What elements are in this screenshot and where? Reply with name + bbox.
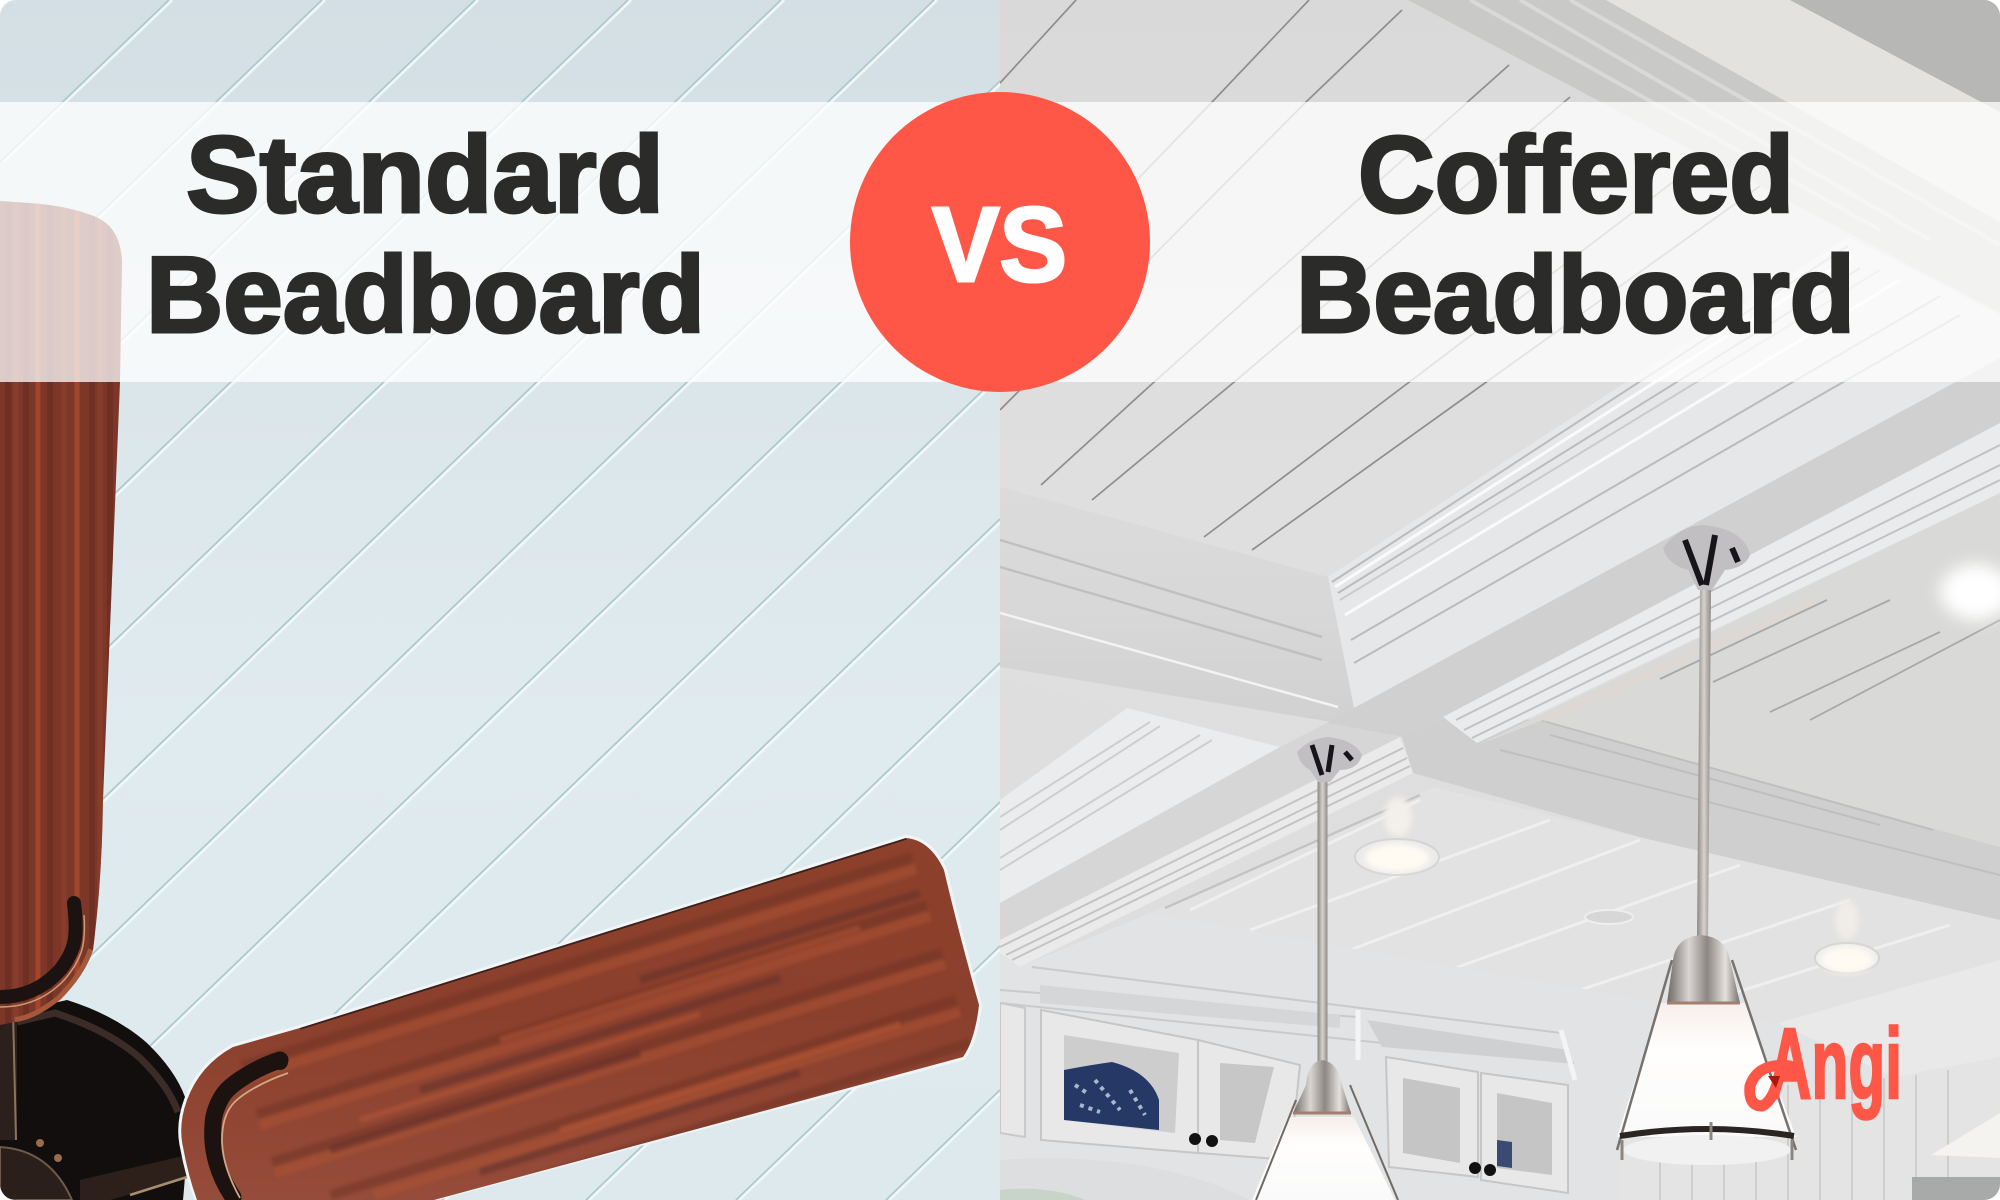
cabinet door with blue pot	[1041, 1010, 1198, 1153]
heading: standard beadboard: Standard	[186, 114, 664, 236]
far right lamp	[1912, 1113, 2000, 1200]
second moulding	[1443, 423, 2000, 743]
heading: coffered beadboard: Coffered	[1358, 114, 1794, 236]
lower left beam	[1000, 708, 1413, 967]
lower right moulding	[1778, 960, 2000, 1077]
centre coffer panel	[1164, 794, 1950, 994]
cabinet knobs	[1189, 1133, 1496, 1176]
vs badge	[850, 92, 1150, 392]
recessed lights	[1355, 564, 2000, 973]
panel: coffered beadboard photo	[1000, 0, 2000, 1200]
ceiling background	[0, 0, 1000, 1200]
pendant lamp: left	[1252, 737, 1398, 1200]
heading: coffered beadboard: Beadboard	[1296, 234, 1855, 356]
cross beam stripes, top right	[1408, 0, 2000, 112]
beam underside and junction	[1327, 358, 2000, 920]
upper cabinets and crown moulding	[1000, 948, 1585, 1200]
vs badge: VS	[932, 186, 1067, 304]
upper ceiling grooves	[1000, 0, 1760, 550]
diagonal beadboard grooves	[0, 0, 1000, 1200]
main beam running up right	[1328, 237, 2000, 708]
beadboard wall, right	[1659, 1070, 1949, 1200]
upper ceiling panel	[1000, 0, 2000, 967]
logo: Angi: Angi	[1768, 1008, 1902, 1120]
cabinet door with shelf	[1198, 1040, 1300, 1160]
lower arch	[1000, 1158, 1250, 1200]
cabinet doors, right pair	[1386, 1057, 1568, 1193]
heading: standard beadboard	[152, 132, 700, 334]
heading: coffered beadboard	[1302, 132, 1850, 334]
ceiling fan motor housing	[0, 1000, 205, 1200]
logo: Angi	[1744, 1024, 1898, 1121]
lower left panel	[1000, 678, 1127, 800]
cabinet door: far left	[1000, 1003, 1025, 1137]
title band	[0, 102, 2000, 382]
left beam running across	[1000, 538, 1354, 722]
fan blade: vertical left	[0, 200, 125, 1030]
heading: standard beadboard: Beadboard	[146, 234, 705, 356]
panel: standard beadboard photo	[0, 0, 1000, 1200]
pendant lamp: right	[1617, 525, 1796, 1165]
right coffer panel	[1483, 597, 2000, 743]
fan blade: angled lower right	[175, 830, 985, 1200]
